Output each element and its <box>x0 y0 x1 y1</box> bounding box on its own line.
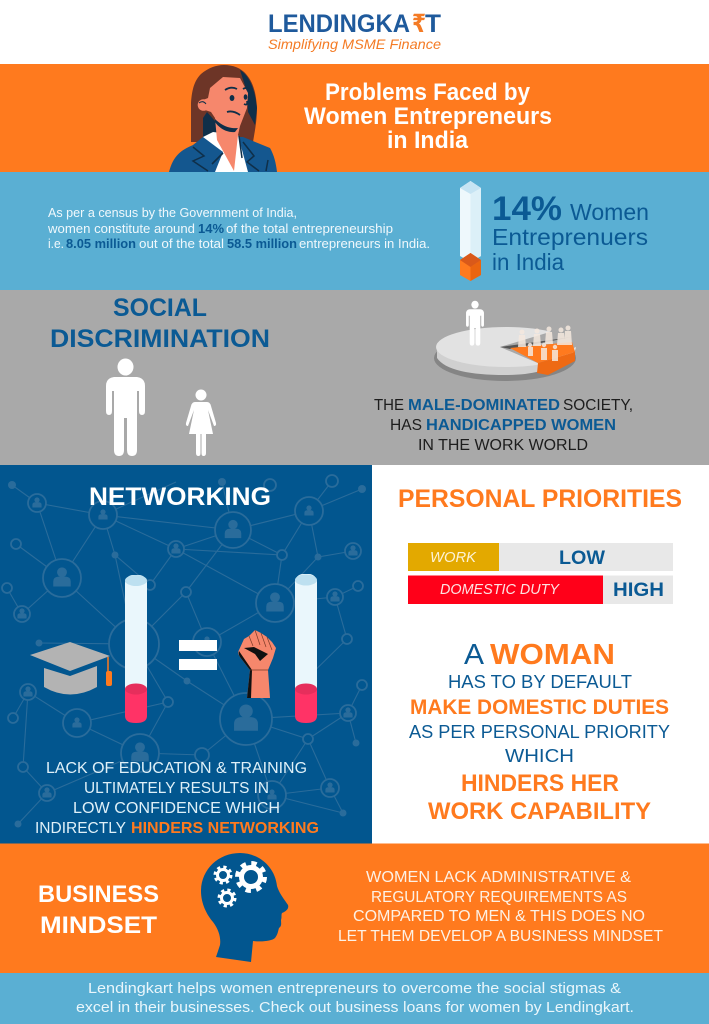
census paragraph: As per a census by the Government of India, <box>48 205 297 220</box>
icon: 14 percent tube <box>460 181 481 281</box>
census paragraph: of the total entrepreneurship <box>226 221 393 236</box>
census paragraph: women constitute around <box>47 221 195 236</box>
panel: census statistic <box>0 172 709 290</box>
icon: thoughtful woman <box>169 65 277 172</box>
logo wordmark: ₹ <box>412 10 426 38</box>
heading: PERSONAL PRIORITIES <box>398 485 682 513</box>
statistic label: in India <box>492 249 564 275</box>
statement: AS PER PERSONAL PRIORITY <box>409 722 670 742</box>
caption: HINDERS NETWORKING <box>131 820 319 837</box>
caption: HAS <box>390 417 422 434</box>
statistic label: 14% <box>492 190 562 228</box>
description: LET THEM DEVELOP A BUSINESS MINDSET <box>338 928 664 945</box>
census paragraph: 14% <box>198 221 224 236</box>
caption: INDIRECTLY <box>35 820 126 837</box>
description: COMPARED TO MEN & THIS DOES NO <box>353 908 645 925</box>
heading: MINDSET <box>40 912 157 939</box>
caption: ULTIMATELY RESULTS IN <box>84 780 269 797</box>
icon: tube low confidence <box>295 574 317 723</box>
icon: man on pie <box>466 301 484 346</box>
statement: WORK CAPABILITY <box>428 798 651 825</box>
logo wordmark: LENDINGKA <box>268 10 410 38</box>
panel: footer call to action <box>0 973 709 1024</box>
logo tagline: Simplifying MSME Finance <box>268 36 441 52</box>
statement: HINDERS HER <box>461 770 619 797</box>
panel: title banner <box>0 64 709 172</box>
bar: work low <box>408 543 673 571</box>
logo wordmark: T <box>425 10 441 38</box>
census paragraph: out of the total <box>139 236 224 251</box>
title: Problems Faced by <box>325 79 531 106</box>
icon: tube low education <box>125 575 147 723</box>
statement <box>409 639 670 825</box>
statement: MAKE DOMESTIC DUTIES <box>410 695 669 719</box>
statistic label: Entreprenuers <box>492 224 648 250</box>
footer text <box>76 980 634 1016</box>
heading <box>50 294 270 353</box>
network background pattern <box>2 475 367 828</box>
statement: A <box>464 639 485 671</box>
caption: THE <box>374 397 404 414</box>
description: REGULATORY REQUIREMENTS AS <box>371 889 627 906</box>
statement: WOMAN <box>490 639 615 671</box>
icon: man <box>106 358 145 456</box>
caption: LACK OF EDUCATION & TRAINING <box>46 760 307 777</box>
heading: DISCRIMINATION <box>50 325 270 353</box>
heading: SOCIAL <box>113 294 207 322</box>
icon: crowd of women <box>518 326 572 361</box>
icon: equals sign <box>179 640 217 670</box>
icon: raised fist <box>238 630 276 698</box>
caption: MALE-DOMINATED <box>408 397 560 414</box>
census paragraph: i.e. <box>48 236 64 251</box>
header: logo <box>0 0 709 64</box>
bar: domestic duty high <box>408 576 673 604</box>
bar: domestic duty high: HIGH <box>613 580 664 601</box>
statement: HAS TO BY DEFAULT <box>448 672 632 692</box>
gears <box>216 864 264 906</box>
icon: head with gears <box>201 853 288 962</box>
heading <box>38 881 159 939</box>
heading: NETWORKING <box>89 483 271 511</box>
caption: IN THE WORK WORLD <box>418 437 588 454</box>
caption: SOCIETY, <box>563 397 633 414</box>
icon: graduation cap <box>30 642 112 694</box>
panel: networking <box>0 465 372 844</box>
footer text: Lendingkart helps women entrepreneurs to overcome the social stigmas & <box>88 980 621 997</box>
title <box>304 79 552 154</box>
title: Women Entrepreneurs <box>304 103 552 130</box>
census paragraph: 8.05 million <box>66 236 136 251</box>
statement: WHICH <box>505 746 574 766</box>
bar: domestic duty high: DOMESTIC DUTY <box>440 581 560 598</box>
panel: personal priorities <box>372 465 709 844</box>
title: in India <box>387 127 469 154</box>
census paragraph: 58.5 million <box>227 236 297 251</box>
footer text: excel in their businesses. Check out business loans for women by Lendingkart. <box>76 999 634 1016</box>
census paragraph: entrepreneurs in India. <box>299 236 430 251</box>
census paragraph <box>47 205 430 251</box>
panel: business mindset <box>0 844 709 974</box>
icon: woman <box>186 390 216 456</box>
caption <box>374 397 633 454</box>
caption: HANDICAPPED WOMEN <box>426 417 616 434</box>
description: WOMEN LACK ADMINISTRATIVE & <box>366 869 632 886</box>
panel: social discrimination <box>0 290 709 465</box>
description <box>338 869 664 945</box>
statistic label: Women <box>570 199 649 225</box>
bar: work low: LOW <box>559 548 605 569</box>
statistic label <box>492 190 649 275</box>
caption: LOW CONFIDENCE WHICH <box>73 800 280 817</box>
caption <box>35 760 319 837</box>
bar: work low: WORK <box>430 549 477 566</box>
pie chart with people <box>434 301 580 381</box>
heading: BUSINESS <box>38 881 159 908</box>
